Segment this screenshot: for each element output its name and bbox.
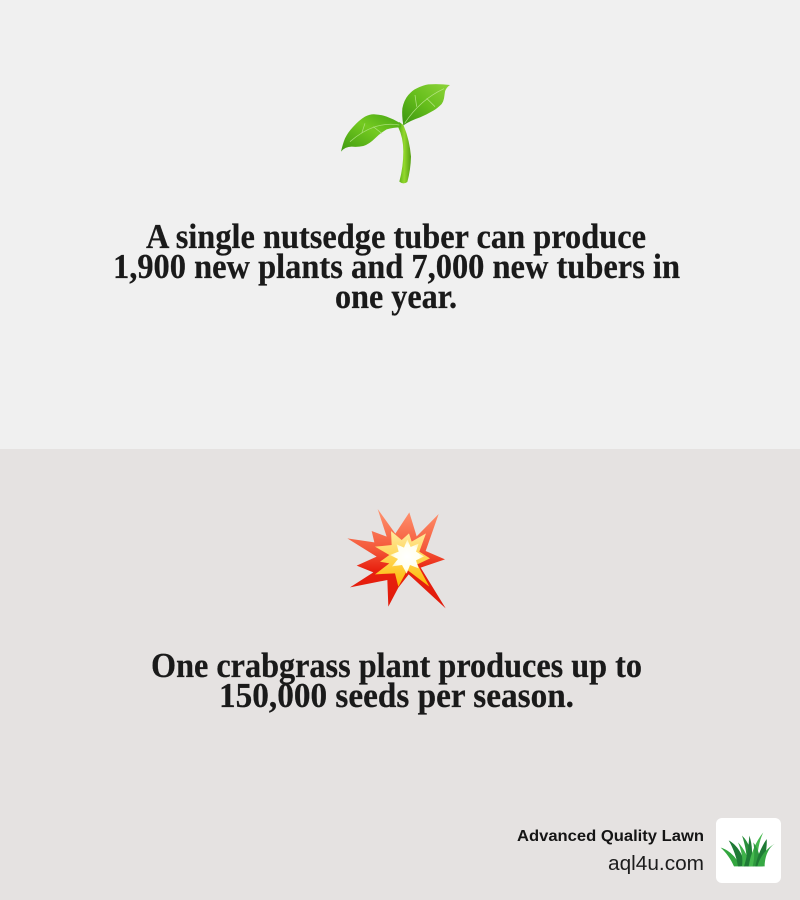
heading: crabgrass fact: 150,000 seeds per season.: [219, 676, 574, 715]
panel: crabgrass: [0, 449, 800, 900]
brand name: Advanced Quality Lawn: [517, 828, 704, 845]
heading: nutsedge fact: 1,900 new plants and 7,000 new tubers in: [113, 247, 680, 286]
heading: nutsedge fact: one year.: [335, 277, 457, 316]
panel: nutsedge: [0, 0, 800, 449]
heading: crabgrass fact: One crabgrass plant produces up to: [151, 646, 642, 685]
heading: nutsedge fact: A single nutsedge tuber can produce: [146, 217, 646, 256]
logo: grass tuft: [716, 818, 781, 883]
footer brand: [517, 818, 781, 883]
icon: seedling: [341, 84, 450, 183]
brand website: aql4u.com: [608, 853, 704, 875]
icon: collision burst: [347, 509, 446, 608]
